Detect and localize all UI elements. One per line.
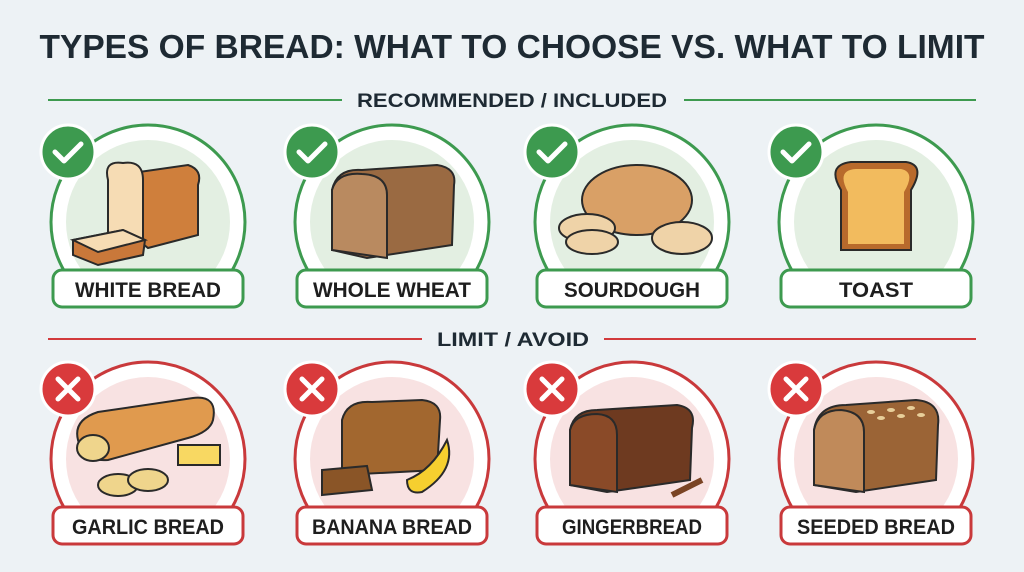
label: [297, 270, 487, 307]
label: [53, 507, 243, 544]
title: TYPES OF BREAD: WHAT TO CHOOSE VS. WHAT TO LIMIT: [40, 28, 985, 65]
label: [53, 270, 243, 307]
label: BANANA BREAD: [312, 516, 472, 539]
label: WHOLE WHEAT: [313, 279, 471, 302]
label: GARLIC BREAD: [72, 516, 224, 539]
label: [781, 507, 971, 544]
icon: wheat loaf: [332, 165, 454, 258]
panel: garlic bread: [41, 362, 245, 556]
icon: banana loaf: [322, 400, 449, 495]
icon: seeded loaf: [814, 400, 938, 492]
icon: check badge: [285, 125, 339, 179]
icon: ginger loaf: [570, 405, 702, 495]
icon: baguette: [77, 398, 220, 496]
label: [297, 507, 487, 544]
label: GINGERBREAD: [562, 516, 702, 539]
label: [537, 507, 727, 544]
icon: sourdough: [559, 165, 712, 254]
icon: toast slice: [835, 162, 917, 250]
icon: check badge: [769, 125, 823, 179]
label: TOAST: [839, 279, 913, 302]
panel: gingerbread: [525, 362, 729, 556]
icon: white loaf: [73, 163, 199, 265]
icon: check badge: [525, 125, 579, 179]
icon: x badge: [525, 362, 579, 416]
panel: banana bread: [285, 362, 489, 556]
label: SOURDOUGH: [564, 279, 700, 302]
label: WHITE BREAD: [75, 279, 221, 302]
section heading: recommended: RECOMMENDED / INCLUDED: [357, 91, 667, 112]
panel: toast: [769, 125, 973, 319]
label: [781, 270, 971, 307]
section heading: limit: LIMIT / AVOID: [437, 330, 589, 351]
panel: sourdough: [525, 125, 729, 319]
panel: whole wheat: [285, 125, 489, 319]
panel: white bread: [41, 125, 245, 319]
icon: x badge: [769, 362, 823, 416]
label: SEEDED BREAD: [797, 516, 955, 539]
panel: seeded bread: [769, 362, 973, 556]
icon: check badge: [41, 125, 95, 179]
icon: x badge: [41, 362, 95, 416]
icon: x badge: [285, 362, 339, 416]
label: [537, 270, 727, 307]
